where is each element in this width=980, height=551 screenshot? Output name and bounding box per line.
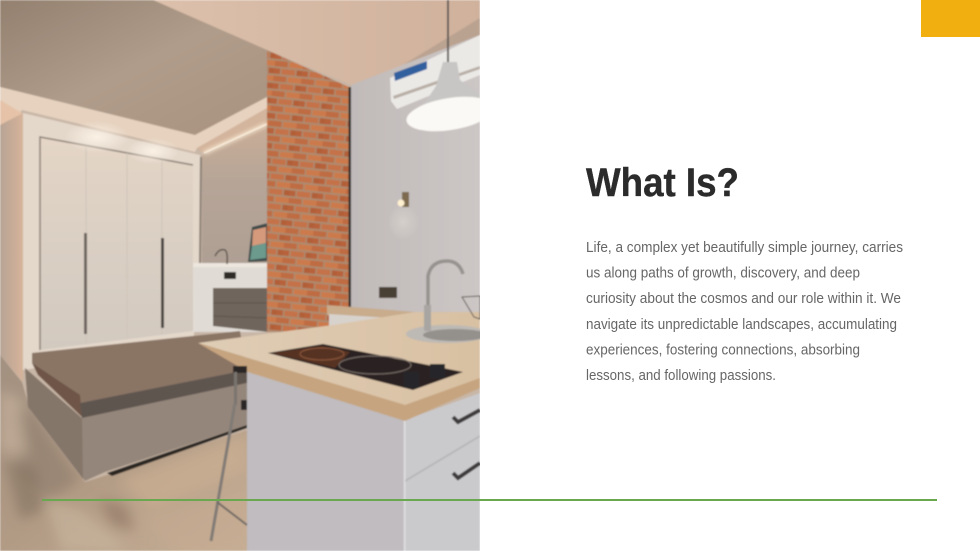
photo: framed art [248, 223, 268, 262]
yellow corner block [921, 0, 980, 37]
photo: induction hob [268, 344, 463, 390]
photo: brick column [267, 50, 349, 332]
body paragraph: navigate its unpredictable landscapes, accumulating [586, 316, 897, 333]
photo: studio apartment interior [0, 0, 496, 551]
photo: wood floor [0, 355, 247, 551]
photo: floor planks [0, 390, 247, 551]
photo: wire basket [462, 296, 480, 319]
photo: wood ceiling panel [0, 0, 267, 135]
photo: sink [406, 325, 488, 343]
photo: left wall [0, 113, 23, 382]
photo: ceiling fascia [0, 87, 267, 152]
body paragraph: us along paths of growth, discovery, and deep [586, 264, 860, 282]
photo: wall sconce [394, 191, 411, 231]
photo: wardrobe doors [40, 222, 193, 350]
photo: air conditioner [390, 35, 480, 109]
photo: pendant lamp [406, 0, 480, 132]
photo: faucet [426, 258, 465, 306]
photo: cabinet drawers [404, 393, 480, 551]
photo: bar stool [211, 366, 247, 541]
photo: grey right wall [351, 35, 480, 325]
body paragraph [586, 239, 903, 384]
photo: mattress [32, 331, 247, 403]
photo: ceiling shadow near AC [408, 18, 480, 63]
photo: kitchen shelf [326, 304, 414, 318]
title: What Is? [586, 161, 739, 205]
green rule [42, 499, 937, 501]
photo: soffit underside [197, 108, 267, 153]
photo: alcove wall [202, 125, 267, 265]
photo: bed frame [81, 382, 248, 482]
photo: headboard [213, 288, 268, 332]
body paragraph: lessons, and following passions. [586, 367, 776, 384]
photo: cabinet under shelf [193, 263, 267, 332]
photo: desk lamp [215, 250, 227, 264]
photo: LED strip [204, 124, 267, 153]
photo: spot lights [72, 124, 124, 150]
photo: wardrobe handles [84, 233, 87, 334]
photo: worktop [198, 312, 480, 405]
body paragraph: Life, a complex yet beautifully simple journey, carries [586, 239, 903, 256]
body paragraph: experiences, fostering connections, absorbing [586, 342, 860, 358]
body paragraph: curiosity about the cosmos and our role within it. We [586, 290, 901, 307]
photo: wall outlet [379, 287, 397, 298]
photo: dark column edge [348, 87, 352, 307]
photo: counter side cabinet [247, 372, 404, 551]
photo: bright ceiling [153, 0, 480, 85]
photo: wardrobe surround [23, 113, 200, 370]
